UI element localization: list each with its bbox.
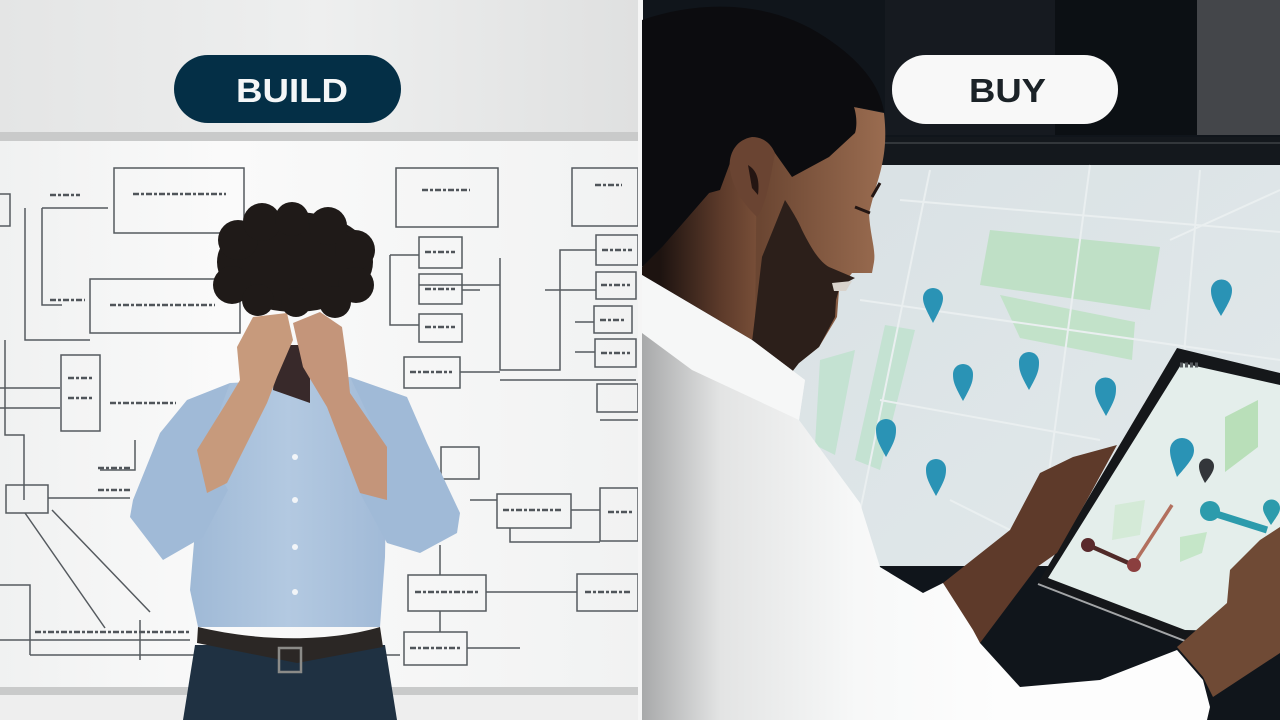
collar [642,275,805,420]
button: BUY [892,55,1118,124]
hair [642,7,884,267]
button: BUILD [174,55,401,123]
near hand and forearm [1177,527,1280,697]
left sleeve [130,383,230,560]
afro hair [213,202,375,318]
face [755,107,885,363]
panel: build (left half) [0,0,640,720]
background wall panels [885,0,1280,135]
tablet pins [1170,438,1194,477]
white shirt [642,275,1210,720]
monitor [790,137,1280,567]
far hand and forearm [943,445,1117,643]
right sleeve [350,377,460,553]
right hand and forearm [293,312,387,500]
ear [730,137,775,217]
flowchart diagram [0,168,638,665]
route lines [1088,545,1133,565]
face shadow and collar [273,345,310,403]
trousers [183,645,397,720]
eye and brow [855,183,880,213]
left hand and forearm [197,313,293,493]
neck [642,163,765,340]
tablet [1038,348,1280,642]
shirt body [190,377,387,627]
person: stressed man [130,202,460,720]
map [815,165,1280,560]
whiteboard scribbles [35,185,632,648]
divider [638,0,643,720]
panel: buy (right half) [642,0,1280,720]
belt [197,627,383,663]
person: smiling man [642,7,1280,720]
smile [832,281,852,291]
shirt buttons [292,454,298,595]
map pins [876,280,1232,496]
beard [752,200,855,372]
button: BUY: BUY [969,72,1046,109]
button: BUILD: BUILD [236,72,348,109]
whiteboard [0,132,640,720]
